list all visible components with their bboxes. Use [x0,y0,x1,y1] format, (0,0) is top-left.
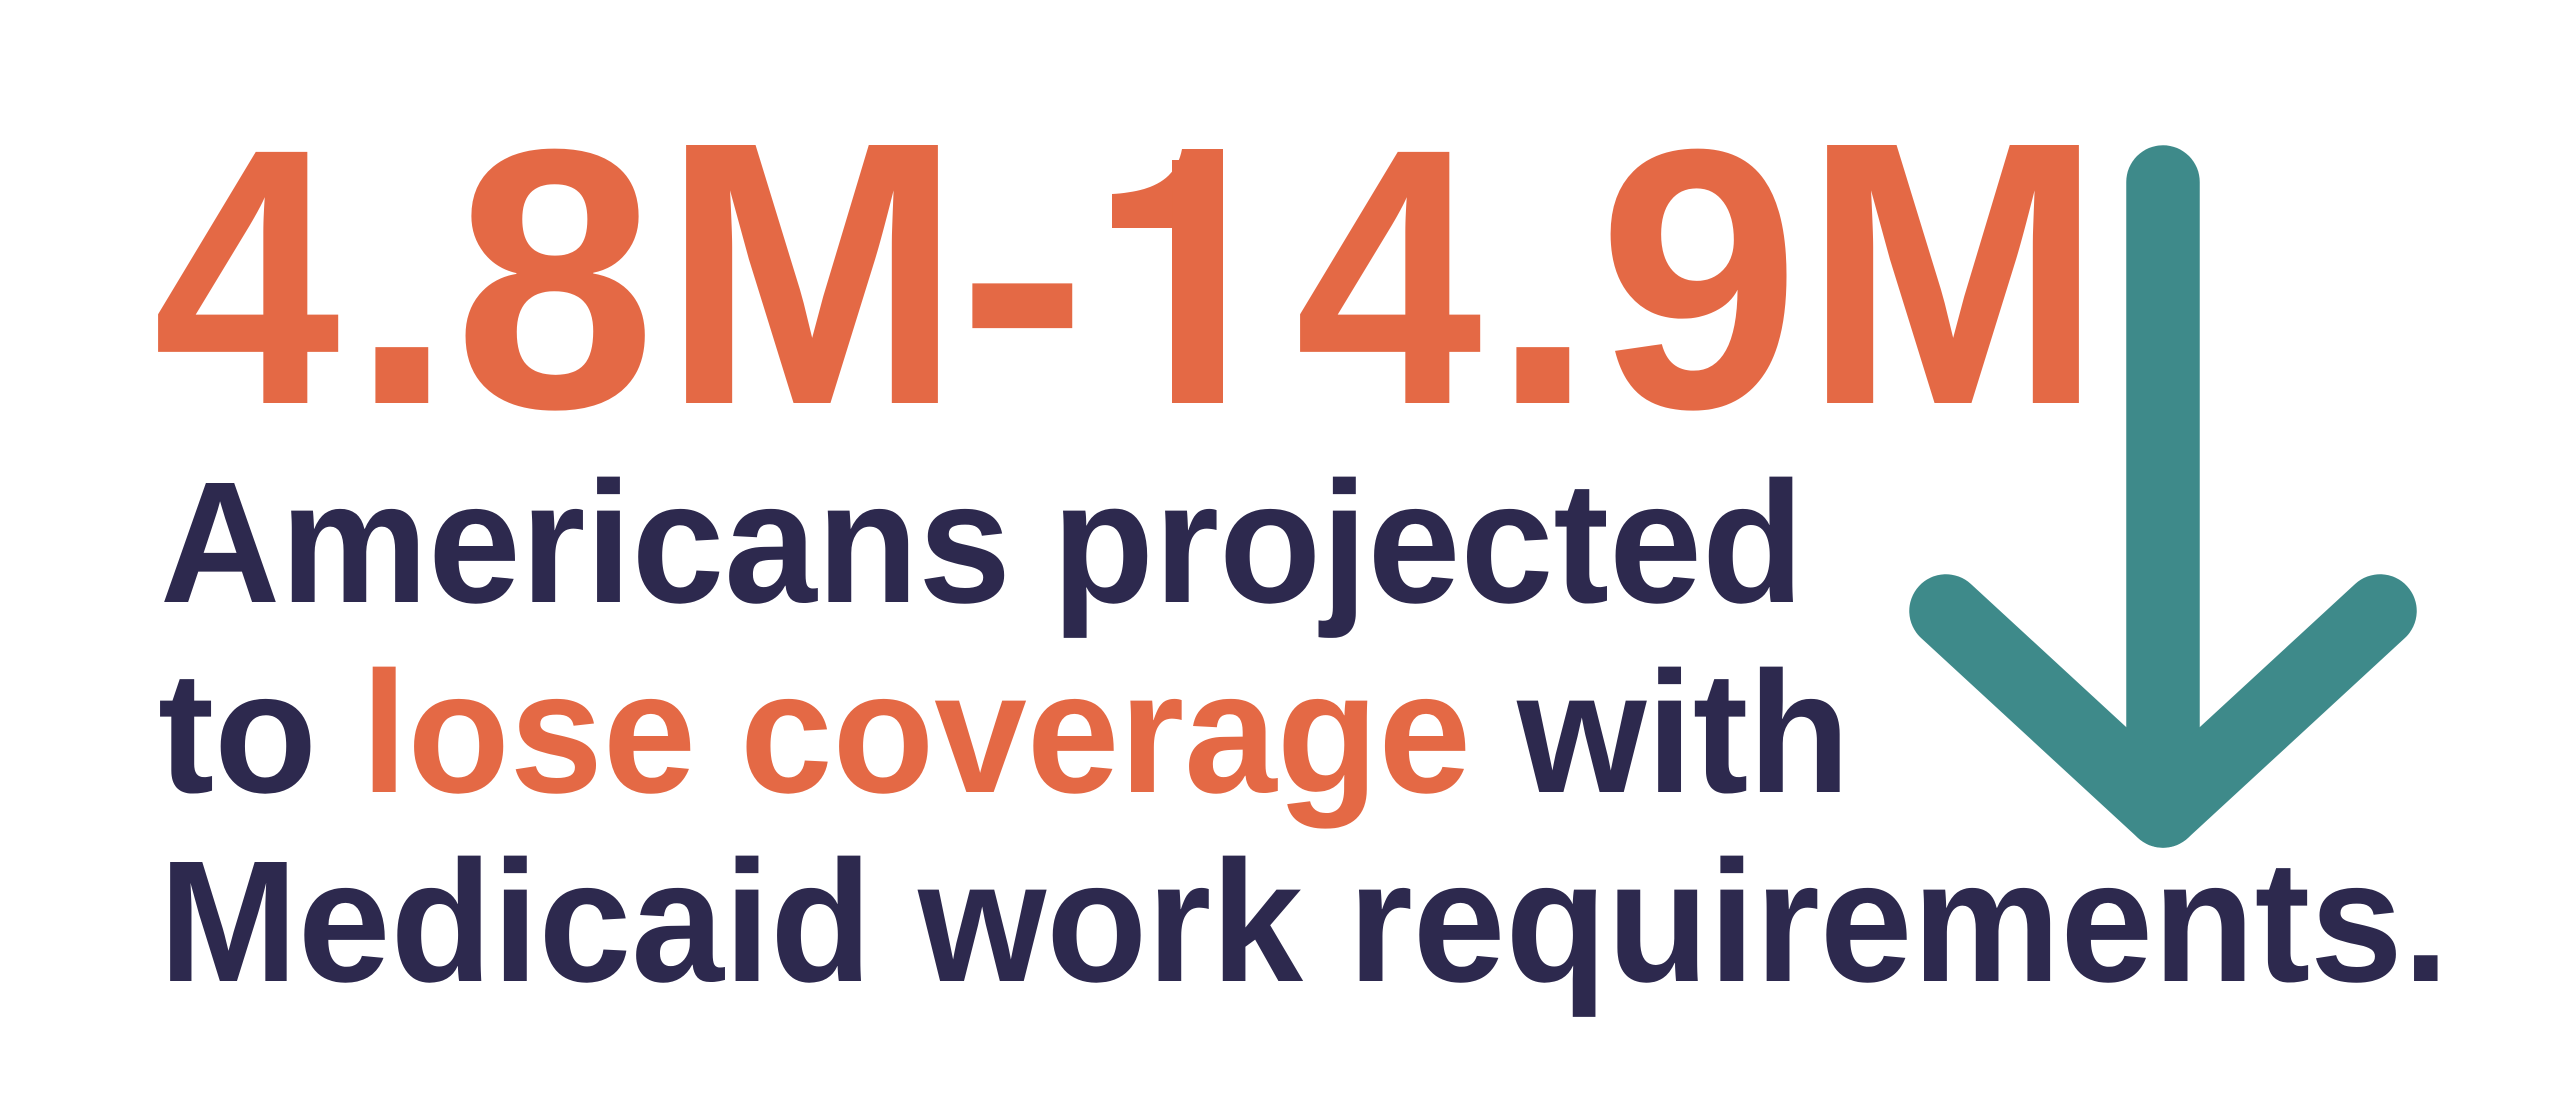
description text block [158,445,2449,1018]
headline statistic: 4.8M-14.9M: M [1803,65,2103,483]
headline statistic: 4.8M-14.9M: 4 [153,74,342,481]
line 3: Medicaid work requirements.: work [917,824,1304,1018]
line 3: Medicaid work requirements. [159,824,2449,1018]
icon: teal downward arrow [1946,182,2380,811]
headline statistic: 4.8M-14.9M [158,145,2079,411]
headline statistic: 4.8M-14.9M: . [1491,65,1595,483]
line 1: Americans projected [160,445,1804,639]
headline statistic: 4.8M-14.9M: . [350,65,454,483]
line 3: Medicaid work requirements.: requirements. [1348,824,2449,1018]
line 3: Medicaid work requirements.: Medicaid [159,824,872,1018]
line 2: to lose coverage with: coverage [740,635,1471,829]
headline statistic: 4.8M-14.9M: 4 [1295,74,1484,481]
line 1: Americans projected: Americans [160,445,1011,639]
headline statistic: 4.8M-14.9M: M [662,65,962,483]
line 2: to lose coverage with: with [1516,635,1850,829]
line 2: to lose coverage with: lose [361,635,696,829]
line 1: Americans projected: projected [1052,445,1804,639]
headline statistic: 4.8M-14.9M: - [957,65,1088,483]
line 2: to lose coverage with [158,635,1850,829]
headline statistic: 4.8M-14.9M: 9 [1598,73,1800,486]
headline statistic: 4.8M-14.9M: 1 [1089,65,1289,483]
headline statistic: 4.8M-14.9M: 8 [454,73,656,486]
line 2: to lose coverage with: to [158,635,317,829]
